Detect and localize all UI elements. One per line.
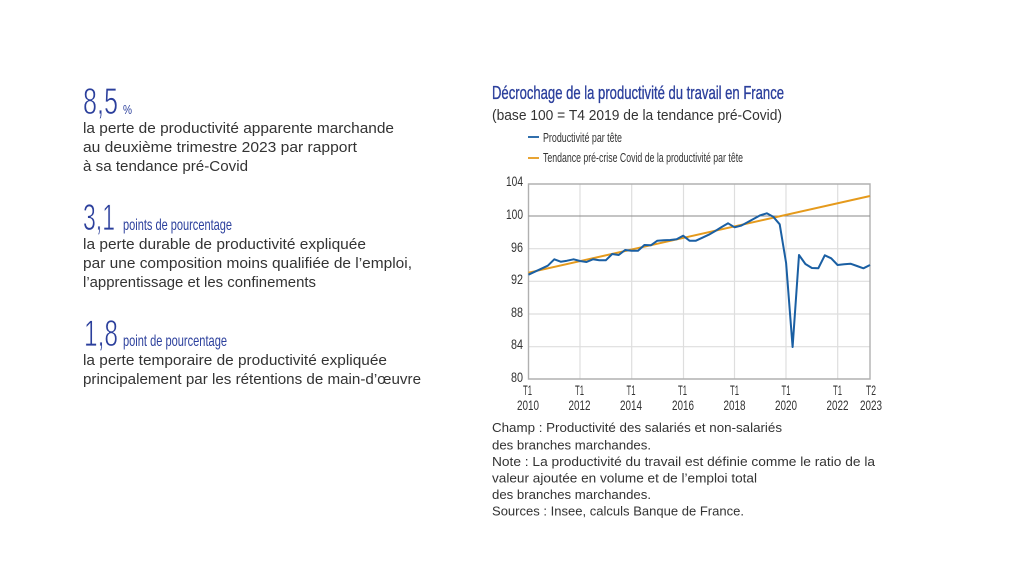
reference line at 100: [528, 215, 870, 217]
description 1,8: [83, 353, 421, 388]
x axis labels: 2023: [860, 397, 882, 413]
notes and sources: valeur ajoutée en volume et de l’emploi total: [492, 470, 757, 486]
description 8,5: à sa tendance pré-Covid: [83, 159, 248, 175]
notes and sources: [492, 420, 876, 518]
x axis labels: 2010: [517, 397, 539, 413]
unit points de pourcentage: points de pourcentage: [123, 217, 232, 234]
y axis labels: [506, 173, 523, 385]
value 8,5: 8,5: [83, 81, 118, 122]
description 3,1: par une composition moins qualifiée de l’emploi,: [83, 256, 412, 272]
unit %: %: [123, 102, 132, 117]
description 8,5: au deuxième trimestre 2023 par rapport: [83, 140, 357, 156]
key figure: 3,1 points de pourcentage: [83, 197, 412, 291]
y axis labels: 92: [511, 271, 523, 287]
x axis labels: 2018: [724, 397, 746, 413]
x axis labels: 2016: [672, 397, 694, 413]
key figure: 8,5 %: [83, 81, 394, 175]
legend item: tendance pré-crise: Tendance pré-crise Covid de la productivité par tête: [543, 151, 743, 165]
legend item: productivité par tête: [528, 131, 622, 145]
notes and sources: Note : La productivité du travail est définie comme le ratio de la: [492, 454, 876, 469]
x axis labels: T1: [575, 382, 584, 398]
x axis labels: 2020: [775, 397, 797, 413]
y axis labels: 104: [506, 173, 523, 189]
description 1,8: la perte temporaire de productivité expliquée: [83, 353, 387, 369]
key figure: 1,8 point de pourcentage: [83, 313, 421, 388]
x axis labels: T1: [782, 382, 791, 398]
y axis labels: 100: [506, 206, 523, 222]
line chart: [506, 173, 882, 413]
x axis labels: T1: [626, 382, 636, 398]
x axis labels: T1: [833, 382, 842, 398]
x axis labels: 2012: [568, 397, 591, 413]
value 1,8: 1,8: [84, 313, 118, 354]
x axis labels: T1: [678, 382, 687, 398]
notes and sources: Champ : Productivité des salariés et non-salariés: [492, 420, 782, 435]
unit point de pourcentage: point de pourcentage: [123, 333, 227, 350]
description 1,8: principalement par les rétentions de main-d’œuvre: [83, 372, 421, 388]
legend: [528, 131, 743, 165]
x axis labels: T1: [523, 382, 532, 398]
value 3,1: 3,1: [83, 197, 115, 238]
gridlines: [528, 184, 870, 379]
plot frame: [528, 184, 870, 379]
x axis labels: T1: [730, 382, 739, 398]
description 3,1: la perte durable de productivité expliquée: [83, 237, 366, 253]
notes and sources: Sources : Insee, calculs Banque de France.: [492, 504, 744, 518]
trend line: tendance pré-crise Covid: [528, 196, 870, 273]
data line: productivité par tête: [528, 213, 870, 347]
y axis labels: 84: [511, 336, 523, 352]
y axis labels: 80: [511, 369, 523, 385]
description 8,5: la perte de productivité apparente marchande: [83, 121, 394, 137]
notes and sources: des branches marchandes.: [492, 438, 651, 452]
description 3,1: l’apprentissage et les confinements: [83, 275, 316, 291]
y axis labels: 88: [511, 304, 523, 320]
x axis labels: 2022: [826, 397, 849, 413]
description 8,5: [83, 121, 394, 175]
chart title: Décrochage de la productivité du travail en France: [492, 83, 784, 103]
legend item: productivité par tête: Productivité par tête: [543, 131, 622, 145]
chart subtitle: (base 100 = T4 2019 de la tendance pré-Covid): [492, 108, 782, 124]
x axis labels: T2: [866, 382, 876, 398]
x axis labels: 2014: [620, 397, 642, 413]
notes and sources: des branches marchandes.: [492, 487, 651, 502]
x axis labels: [517, 382, 882, 413]
y axis labels: 96: [511, 239, 523, 255]
description 3,1: [83, 237, 412, 291]
